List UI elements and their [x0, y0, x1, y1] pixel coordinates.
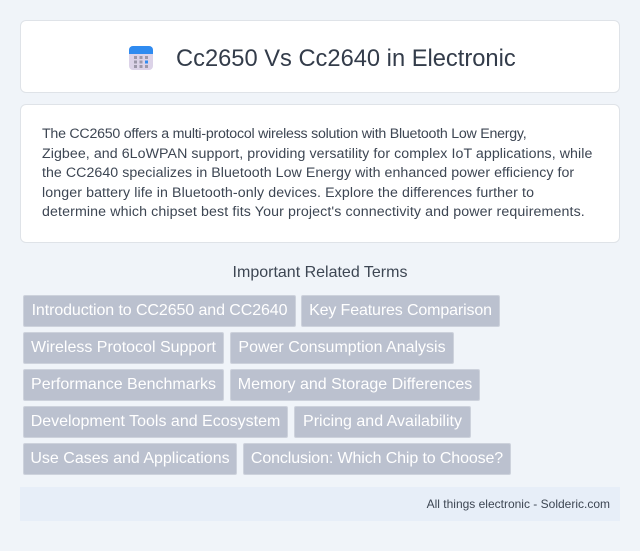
tag: Conclusion: Which Chip to Choose?	[251, 450, 503, 467]
tag: Power Consumption Analysis	[238, 339, 446, 356]
icon: calendar chip	[129, 46, 153, 70]
tag	[230, 332, 454, 364]
section heading: Important Related Terms	[233, 264, 407, 281]
related terms tags	[23, 295, 511, 475]
tag: Pricing and Availability	[303, 413, 462, 430]
tag	[23, 332, 224, 364]
tag: Development Tools and Ecosystem	[31, 413, 280, 430]
intro paragraph	[42, 126, 592, 220]
footer bar	[20, 487, 620, 521]
tag	[230, 369, 480, 401]
tag	[294, 406, 471, 438]
tag	[23, 406, 288, 438]
intro paragraph: longer battery life in Bluetooth-only devices. Explore the differences further to	[42, 184, 534, 200]
tag	[23, 443, 237, 475]
tag: Introduction to CC2650 and CC2640	[32, 302, 287, 319]
intro paragraph: the CC2640 specializes in Bluetooth Low Energy with enhanced power efficiency for	[42, 165, 574, 181]
footer credit: All things electronic - Solderic.com	[427, 497, 610, 511]
title: Cc2650 Vs Cc2640 in Electronic	[176, 46, 516, 72]
tag: Performance Benchmarks	[31, 376, 216, 393]
tag	[243, 443, 511, 475]
header panel	[20, 20, 620, 93]
tag	[23, 369, 224, 401]
tag: Use Cases and Applications	[30, 450, 230, 467]
intro paragraph: The CC2650 offers a multi-protocol wireless solution with Bluetooth Low Energy,	[42, 126, 526, 142]
tag: Key Features Comparison	[309, 302, 492, 319]
intro paragraph: Zigbee, and 6LoWPAN support, providing versatility for complex IoT applications, while	[42, 146, 592, 162]
tag	[23, 295, 296, 327]
tag: Memory and Storage Differences	[238, 376, 472, 393]
tag	[301, 295, 500, 327]
intro text panel	[20, 104, 620, 243]
intro paragraph: determine which chipset best fits Your project's connectivity and power requirements.	[42, 204, 585, 220]
tag: Wireless Protocol Support	[31, 339, 216, 356]
